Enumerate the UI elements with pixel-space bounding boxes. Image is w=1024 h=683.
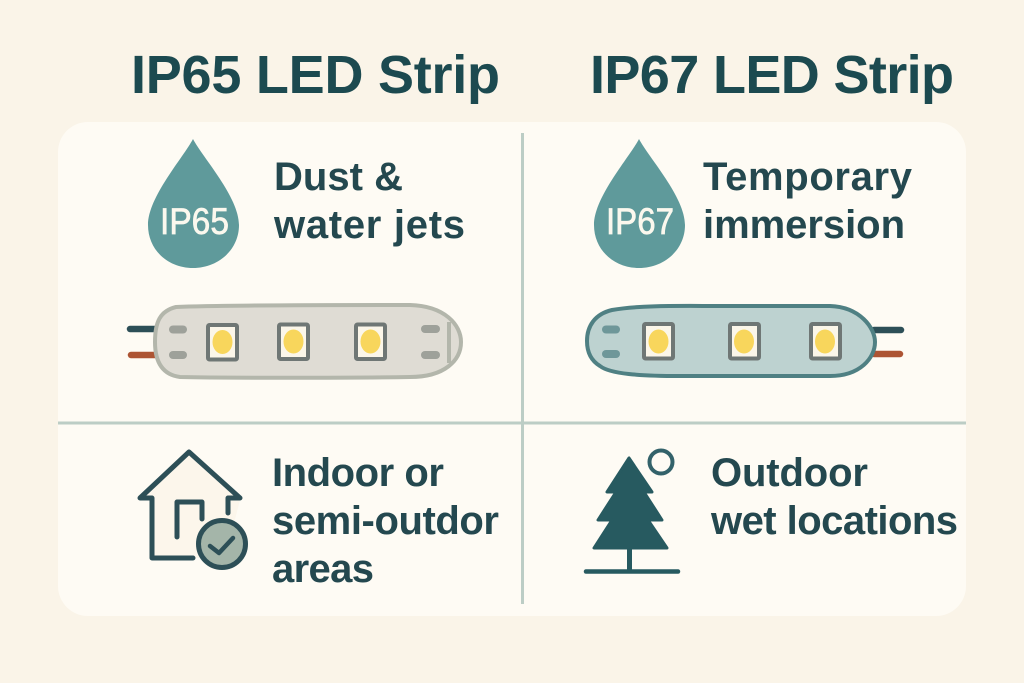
icon: IP67 water drop: IP67 (606, 201, 674, 242)
text: indoor or semi-outdoor areas: semi-outdor (272, 499, 499, 543)
text: indoor or semi-outdoor areas: areas (272, 547, 374, 591)
panel: comparison card (58, 122, 966, 616)
icon: pine tree and sun (586, 450, 678, 572)
heading: IP67 LED Strip: IP67 LED Strip (590, 45, 954, 105)
illustration: IP67 LED strip (587, 306, 901, 376)
text: outdoor wet locations: wet locations (710, 499, 958, 543)
icon: IP65 water drop (148, 139, 239, 268)
icon: house with check badge (140, 452, 246, 568)
icon: IP65 water drop: IP65 (160, 201, 229, 242)
text: outdoor wet locations (710, 451, 958, 543)
text: temporary immersion: Temporary (703, 155, 913, 199)
heading: IP65 LED Strip: IP65 LED Strip (131, 45, 500, 105)
text: temporary immersion (703, 155, 913, 247)
text: dust and water jets: water jets (273, 203, 465, 247)
icon: IP67 water drop (594, 139, 685, 268)
text: indoor or semi-outdoor areas: Indoor or (272, 451, 444, 495)
text: dust and water jets: Dust & (274, 155, 403, 199)
text: temporary immersion: immersion (703, 203, 905, 247)
text: dust and water jets (273, 155, 465, 247)
illustration: IP65 LED strip (130, 305, 461, 378)
text: outdoor wet locations: Outdoor (711, 451, 868, 495)
text: indoor or semi-outdoor areas (272, 451, 499, 591)
